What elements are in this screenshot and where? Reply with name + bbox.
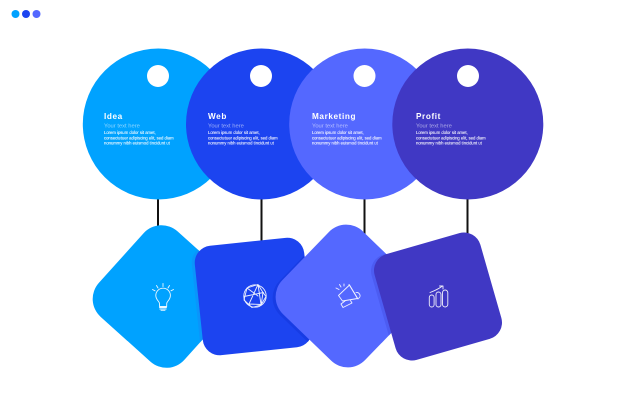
icon: globe network xyxy=(244,284,266,308)
text block: Web: nonummy nibh euismod tincidunt ut xyxy=(208,141,275,146)
text block: Idea: nonummy nibh euismod tincidunt ut xyxy=(104,141,171,146)
icon: growth bars xyxy=(429,286,448,307)
text block: Web: Your text here xyxy=(208,124,244,130)
tile: Profit xyxy=(370,228,506,365)
text block: Idea: consectetuer adipiscing elit, sed diam xyxy=(104,135,174,140)
text block: Marketing: Lorem ipsum dolor sit amet, xyxy=(312,130,364,135)
circle: Profit xyxy=(392,48,543,200)
circle: Web xyxy=(186,48,337,200)
tile shadow on Marketing xyxy=(371,254,392,336)
text block: Web: Lorem ipsum dolor sit amet, xyxy=(208,130,260,135)
icon: megaphone xyxy=(336,284,360,308)
text block: Idea: Idea xyxy=(104,112,123,121)
text block: Marketing: Marketing xyxy=(312,112,356,121)
text block: Profit xyxy=(416,112,486,146)
circle: Idea xyxy=(83,48,234,200)
tile: Idea xyxy=(83,215,245,378)
text block: Profit: Your text here xyxy=(416,124,452,130)
text block: Idea: Your text here xyxy=(104,124,140,130)
text block: Profit: Profit xyxy=(416,112,441,121)
text block: Idea xyxy=(104,112,174,146)
text block: Web xyxy=(208,112,278,146)
text block: Web: consectetuer adipiscing elit, sed diam xyxy=(208,135,278,140)
circle: Marketing xyxy=(289,48,440,200)
tile: Web xyxy=(193,236,314,357)
connector lines xyxy=(158,197,468,245)
text block: Marketing: consectetuer adipiscing elit, sed diam xyxy=(312,135,382,140)
tile shadow on Web xyxy=(272,256,310,342)
text block: Marketing: Your text here xyxy=(312,124,348,130)
text block: Web: Web xyxy=(208,112,227,121)
tile: Marketing xyxy=(266,215,428,377)
tile shadow on Idea xyxy=(192,250,203,342)
pagination dots xyxy=(12,10,40,18)
text block: Marketing: nonummy nibh euismod tincidunt ut xyxy=(312,141,379,146)
text block: Idea: Lorem ipsum dolor sit amet, xyxy=(104,130,156,135)
text block: Profit: nonummy nibh euismod tincidunt ut xyxy=(416,141,483,146)
text block: Profit: Lorem ipsum dolor sit amet, xyxy=(416,130,468,135)
text block: Marketing xyxy=(312,112,382,146)
icon: light bulb xyxy=(152,284,174,310)
text block: Profit: consectetuer adipiscing elit, sed diam xyxy=(416,135,486,140)
